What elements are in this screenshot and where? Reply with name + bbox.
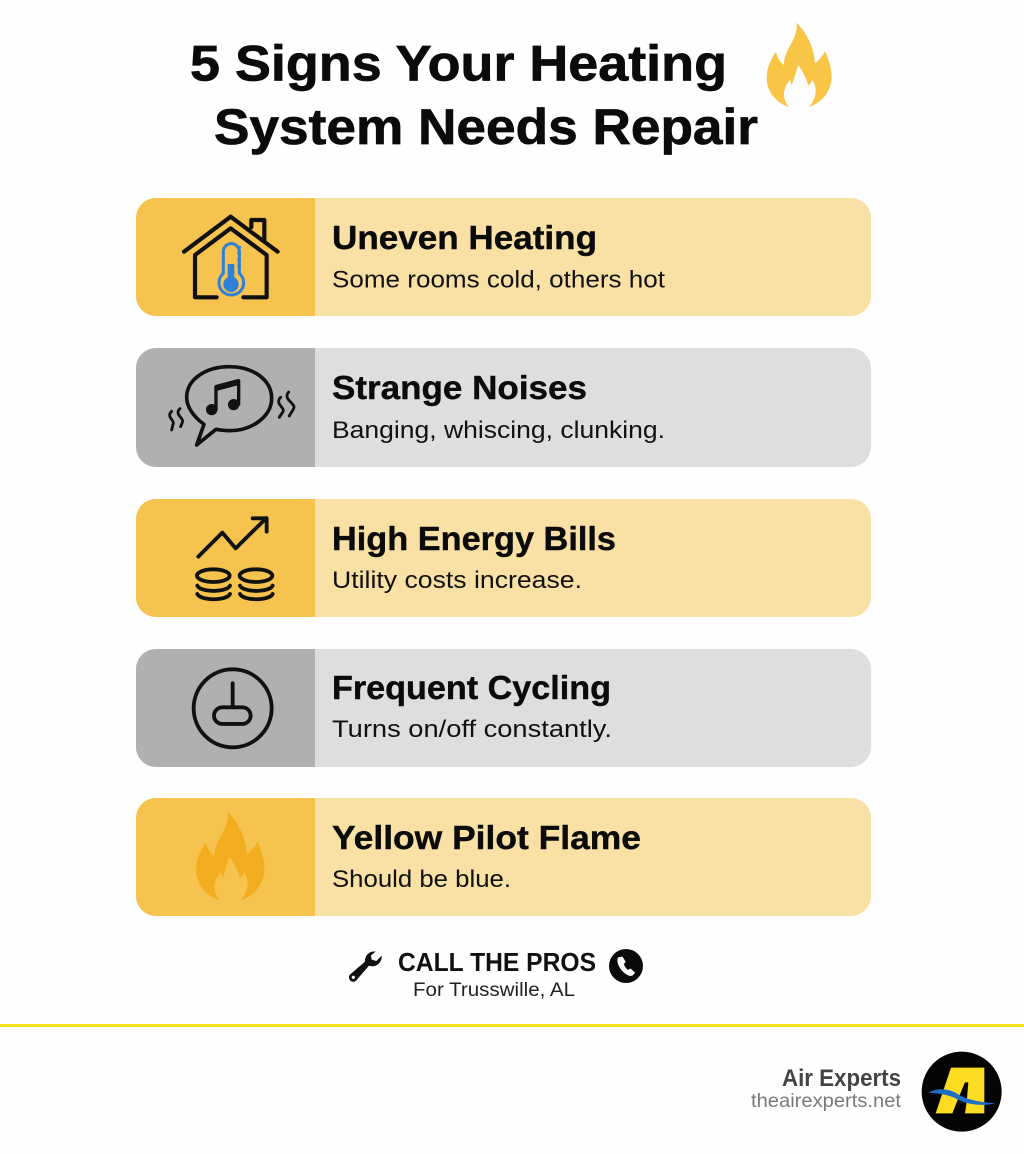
heading: strange noises: Strange Noises — [332, 369, 587, 406]
icon: house with thermometer — [184, 217, 278, 297]
icon: speech bubble with music note — [170, 367, 294, 445]
text: location: For Trusswille, AL — [413, 980, 575, 1001]
panel: uneven heating — [136, 198, 871, 316]
icon: rising arrow and coins — [197, 518, 273, 599]
footer brand text — [751, 1065, 902, 1112]
heading: yellow pilot flame: Yellow Pilot Flame — [332, 819, 641, 856]
footer brand text: Air Experts — [782, 1065, 901, 1092]
title — [190, 36, 758, 155]
icon: orange flame — [196, 812, 264, 900]
footer brand text: theairexperts.net — [751, 1090, 902, 1112]
panel: frequent cycling — [136, 649, 871, 767]
panel: yellow pilot flame — [136, 798, 871, 916]
icon: title flame — [767, 23, 832, 107]
text: frequent cycling detail: Turns on/off constantly. — [332, 716, 612, 743]
call to action — [349, 947, 643, 1001]
icon: dial in circle — [194, 669, 272, 747]
text: uneven heating detail: Some rooms cold, others hot — [332, 266, 665, 294]
heading: frequent cycling: Frequent Cycling — [332, 669, 611, 706]
heading: uneven heating: Uneven Heating — [332, 219, 597, 256]
icon: wrench — [349, 951, 382, 982]
logo — [922, 1052, 1002, 1132]
title: System Needs Repair — [214, 99, 758, 155]
text: high energy bills detail: Utility costs increase. — [332, 567, 582, 594]
text: call the pros: CALL THE PROS — [398, 947, 596, 977]
footer rule — [0, 1024, 1024, 1027]
text: yellow pilot flame detail: Should be blue. — [332, 866, 511, 893]
panel: high energy bills — [136, 499, 871, 617]
text: strange noises detail: Banging, whiscing, clunking. — [332, 417, 665, 444]
icon: phone — [609, 949, 643, 983]
panel: strange noises — [136, 348, 871, 467]
title: 5 Signs Your Heating — [190, 36, 727, 92]
heading: high energy bills: High Energy Bills — [332, 520, 616, 557]
